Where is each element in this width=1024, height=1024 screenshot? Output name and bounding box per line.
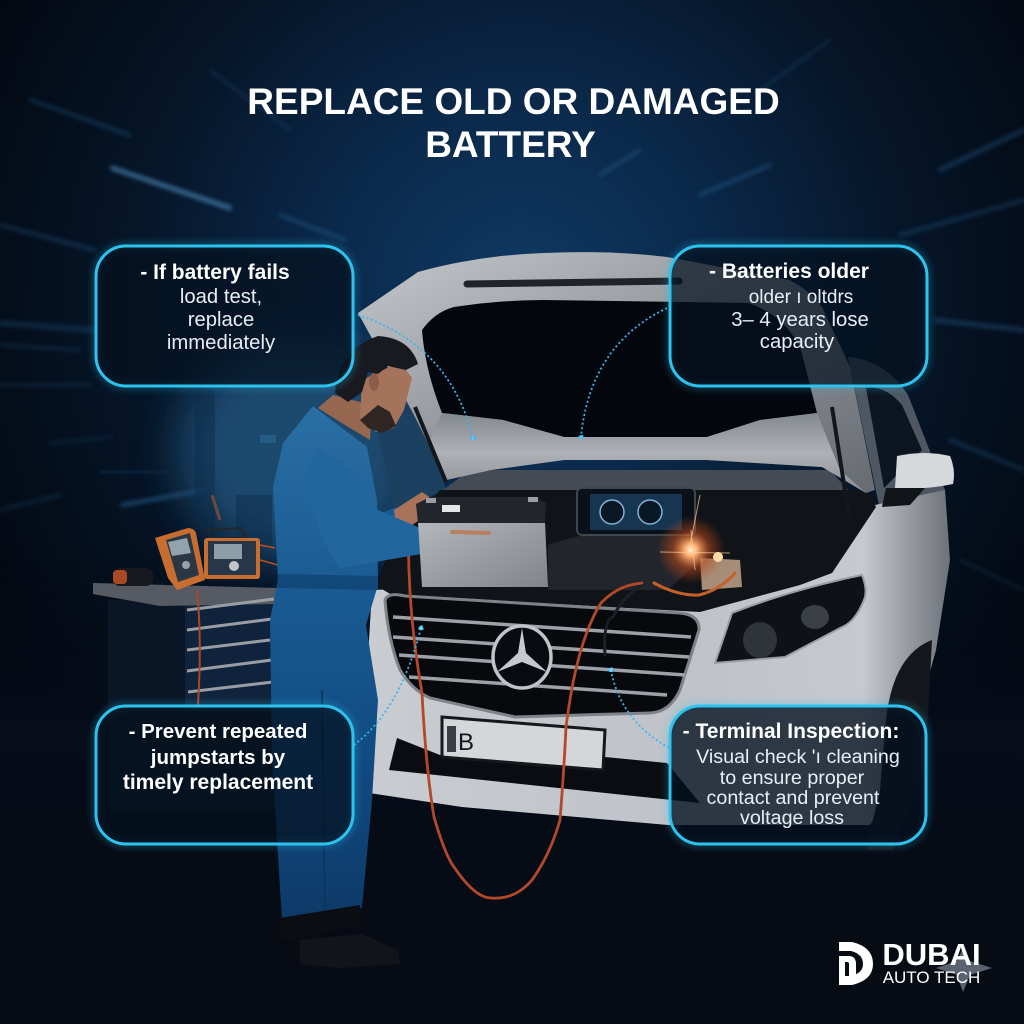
grille [385, 595, 699, 717]
hood inner cavity [422, 300, 817, 437]
callout: terminal inspection: - Terminal Inspection: [683, 720, 899, 743]
engine bay [375, 490, 876, 612]
title: REPLACE OLD OR DAMAGED [247, 81, 780, 122]
callout: if battery fails [96, 246, 353, 386]
multimeter right [204, 528, 278, 579]
callout: terminal inspection [670, 706, 926, 844]
logo: DUBAI [882, 937, 981, 972]
neck [318, 395, 372, 440]
callout: terminal inspection: Visual check 'ı cleaning [696, 746, 900, 768]
car body [366, 357, 954, 850]
tool [113, 568, 153, 586]
boots [278, 905, 362, 940]
logo star [936, 948, 992, 992]
workshop shelves [100, 340, 420, 560]
hair [335, 336, 418, 402]
pointing hand on battery [452, 532, 489, 533]
jumper cables [409, 520, 735, 898]
headlight [715, 575, 866, 663]
workbench [93, 528, 278, 810]
bumper, fender and side [366, 490, 950, 825]
ear [369, 373, 379, 391]
face [360, 362, 412, 432]
callout: if battery fails: replace [188, 309, 254, 331]
windshield under hood [440, 470, 850, 492]
callout: if battery fails: immediately [167, 332, 276, 354]
callout: terminal inspection: contact and prevent [707, 787, 880, 809]
three-pointed star emblem [493, 626, 551, 688]
multimeter left [155, 528, 205, 590]
callout: batteries older [670, 246, 927, 386]
near arm sleeve [305, 447, 433, 568]
logo [839, 937, 992, 992]
open hood [358, 252, 875, 523]
dashboard screen [577, 488, 695, 535]
test lead [197, 590, 200, 705]
title [247, 81, 780, 165]
licence plate [442, 717, 605, 770]
backdrop behind mechanic's face [370, 400, 446, 510]
far hand and sleeve [377, 507, 400, 545]
logo D mark [839, 942, 873, 985]
callout: prevent repeated jumpstarts: - Prevent repeated [129, 720, 307, 743]
callout: if battery fails: load test, [180, 286, 262, 308]
mechanic [270, 336, 489, 968]
callout: batteries older: - Batteries older [709, 260, 869, 283]
battery [416, 497, 548, 587]
wheel [866, 640, 932, 850]
lower intake [389, 738, 700, 803]
callout: batteries older: 3– 4 years lose [731, 309, 869, 331]
callout: if battery fails: - If battery fails [140, 261, 290, 284]
head [335, 336, 418, 433]
title: BATTERY [425, 124, 596, 165]
near hand [432, 517, 489, 553]
callout: terminal inspection: voltage loss [740, 807, 844, 829]
hood lower lip [430, 413, 866, 493]
roof arc and side [848, 357, 945, 510]
callout: terminal inspection: to ensure proper [720, 767, 865, 789]
hood struts [415, 407, 850, 523]
callout: batteries older: capacity [760, 331, 835, 353]
beard [360, 405, 396, 433]
legs and torso [270, 406, 378, 920]
callout: prevent repeated jumpstarts: jumpstarts by [150, 746, 286, 769]
logo: AUTO TECH [883, 968, 980, 987]
side window [866, 388, 922, 488]
callout: prevent repeated jumpstarts [96, 706, 353, 844]
engine cover [548, 532, 700, 590]
callout: prevent repeated jumpstarts: timely replacement [123, 771, 313, 794]
callout: batteries older: older ı oltdrs [749, 287, 853, 308]
spark [657, 495, 730, 584]
dotted connectors [354, 308, 669, 748]
licence plate: B [458, 729, 474, 756]
door mirror [895, 453, 954, 488]
